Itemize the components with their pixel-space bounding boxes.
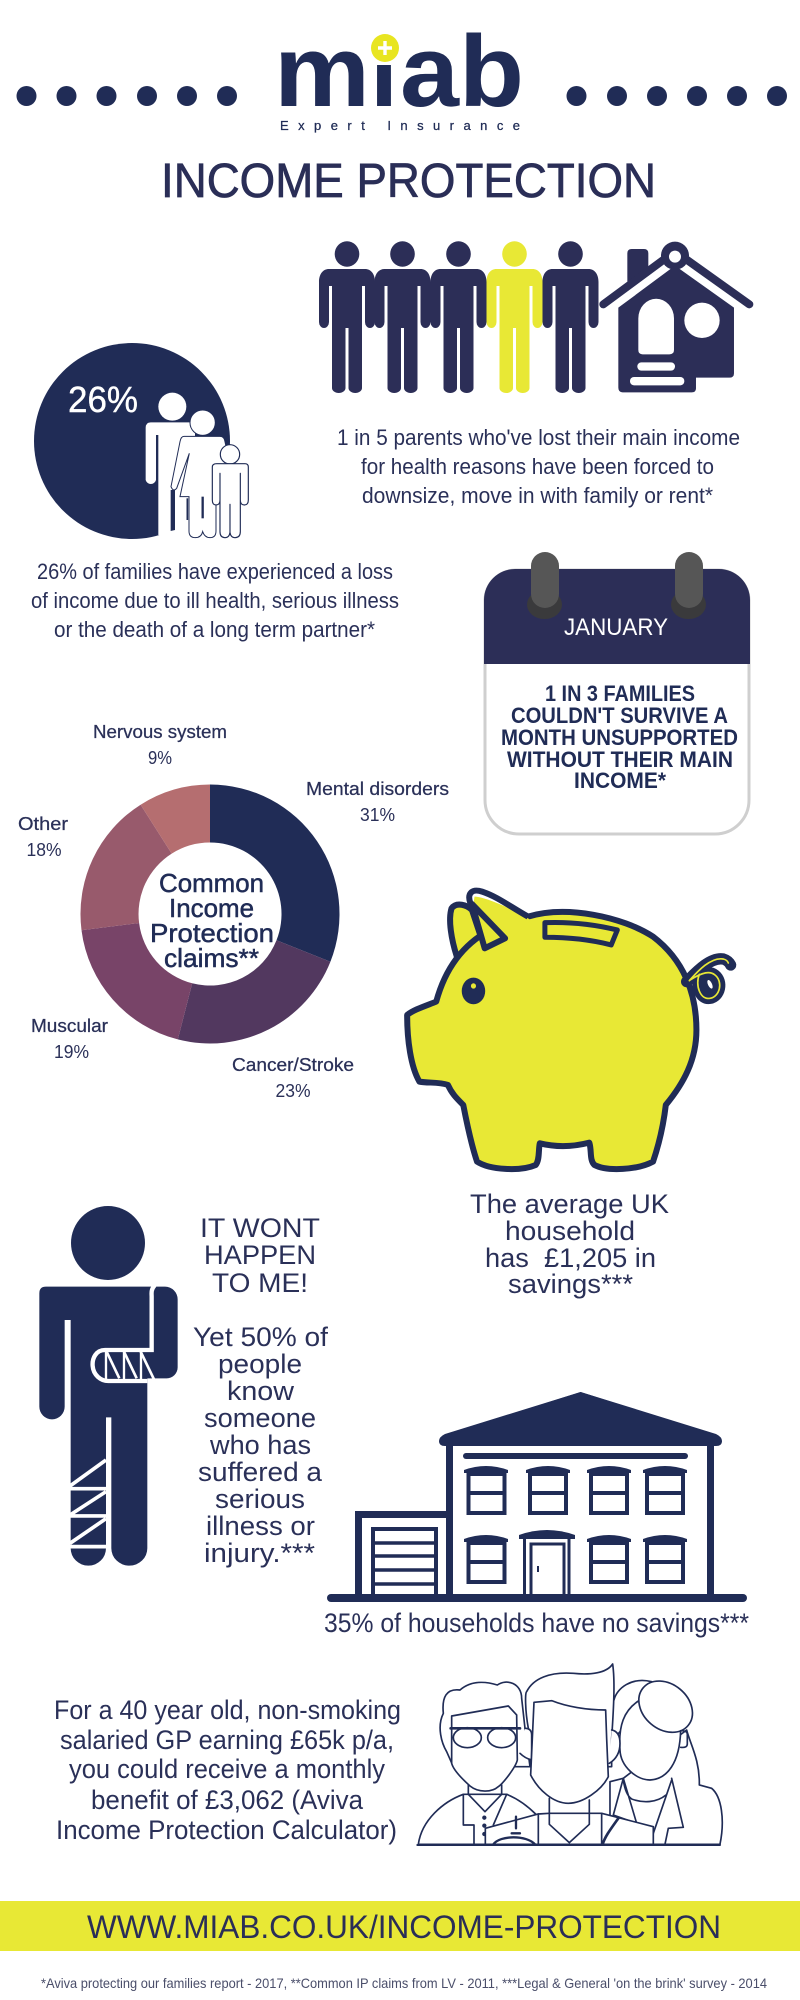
text: yet 50% of people xyxy=(193,1322,329,1568)
icon: injured person with casts xyxy=(39,1206,178,1566)
text: yet 50% of people: serious xyxy=(215,1484,305,1514)
label: cancer/stroke: 23% xyxy=(276,1081,310,1101)
calendar message: WITHOUT THEIR MAIN xyxy=(507,747,733,772)
lower window caps xyxy=(464,1535,687,1542)
label: mental disorders: Mental disorders xyxy=(306,779,449,799)
text: 1 in 5 parents: downsize, move in with family or rent* xyxy=(362,483,713,508)
upper windows xyxy=(468,1474,683,1513)
segment: muscular 19% xyxy=(82,923,192,1039)
text: yet 50% of people: suffered a xyxy=(198,1457,322,1487)
icon: 26% circle with family xyxy=(34,343,248,539)
text: GP benefit example: For a 40 year old, non-smoking xyxy=(54,1695,401,1725)
label: cancer/stroke xyxy=(232,1055,354,1101)
banner: website URL xyxy=(0,1901,800,1951)
text: average UK household savings: household xyxy=(505,1216,635,1246)
donut centre label: Common xyxy=(159,868,264,898)
calendar message: 1 IN 3 FAMILIES xyxy=(545,681,695,706)
segment: mental disorders 31% xyxy=(210,784,340,962)
calendar message: MONTH UNSUPPORTED xyxy=(501,725,738,750)
logo: miab Expert Insurance: Expert Insurance xyxy=(280,118,520,133)
label: muscular: Muscular xyxy=(31,1016,108,1036)
text: yet 50% of people: Yet 50% of xyxy=(193,1322,329,1352)
text: 1 in 5 parents: for health reasons have been forced to xyxy=(361,454,714,479)
logo: miab Expert Insurance xyxy=(274,16,524,133)
text: GP benefit example: salaried GP earning £65k p/a, xyxy=(60,1725,394,1755)
text: GP benefit example: you could receive a monthly xyxy=(69,1754,386,1784)
text: average UK household savings: has £1,205 in xyxy=(485,1243,656,1273)
text: 26% of families xyxy=(31,559,399,642)
decorative dots left xyxy=(16,86,237,106)
text: yet 50% of people: people xyxy=(218,1349,302,1379)
centre man xyxy=(485,1664,653,1844)
text: average UK household savings xyxy=(470,1189,669,1299)
text: yet 50% of people: know xyxy=(227,1376,295,1406)
label: muscular xyxy=(31,1016,108,1062)
icon: piggy bank xyxy=(407,891,731,1169)
logo: miab Expert Insurance: a xyxy=(400,16,460,128)
calendar message xyxy=(501,681,738,793)
segment: other 18% xyxy=(80,805,172,930)
text: yet 50% of people: illness or xyxy=(206,1511,315,1541)
text: 26% of families: 26% of families have experienced a loss xyxy=(37,559,393,584)
label: muscular: 19% xyxy=(54,1042,89,1062)
text: it wont happen to me: HAPPEN xyxy=(204,1240,316,1270)
text: GP benefit example: benefit of £3,062 (Aviva xyxy=(91,1785,363,1815)
label: mental disorders xyxy=(306,779,449,825)
title: INCOME PROTECTION xyxy=(161,155,656,208)
calendar message: COULDN'T SURVIVE A xyxy=(511,703,728,728)
decorative dots right xyxy=(566,86,787,106)
text: 26% of families: of income due to ill health, serious illness xyxy=(31,588,399,613)
front door xyxy=(519,1530,575,1596)
upper window caps xyxy=(464,1466,687,1473)
donut centre label: Income xyxy=(169,893,254,923)
label: mental disorders: 31% xyxy=(360,805,395,825)
text: 1 in 5 parents xyxy=(337,425,740,508)
chart: donut of common income protection claims xyxy=(18,722,449,1101)
man with glasses xyxy=(418,1682,538,1844)
garage xyxy=(355,1511,448,1596)
donut centre label: Protection xyxy=(150,918,274,948)
label: cancer/stroke: Cancer/Stroke xyxy=(232,1055,354,1075)
text: yet 50% of people: injury.*** xyxy=(204,1538,315,1568)
icon: five people and house xyxy=(319,241,749,393)
text: yet 50% of people: who has xyxy=(209,1430,311,1460)
segment: cancer/stroke 23% xyxy=(178,940,330,1043)
panel: calendar xyxy=(484,552,750,834)
text: it wont happen to me: IT WONT xyxy=(200,1213,320,1243)
text: 26% of families: or the death of a long term partner* xyxy=(54,617,375,642)
donut centre label xyxy=(150,868,274,973)
text: yet 50% of people: someone xyxy=(204,1403,316,1433)
lower windows xyxy=(468,1543,683,1582)
icon: family silhouettes xyxy=(146,393,248,538)
icon: house with garage xyxy=(327,1392,747,1602)
label: other: Other xyxy=(18,814,68,834)
icon: house xyxy=(603,242,749,392)
woman xyxy=(608,1670,722,1844)
calendar header xyxy=(484,569,750,664)
text: GP benefit example xyxy=(54,1695,401,1845)
logo: miab Expert Insurance: b xyxy=(459,16,524,128)
icon: pig tail xyxy=(687,959,731,998)
segment: nervous system 9% xyxy=(141,784,210,854)
label: nervous system: Nervous system xyxy=(93,722,227,742)
label: nervous system xyxy=(93,722,227,768)
text: GP benefit example: Income Protection Calculator) xyxy=(56,1815,397,1845)
text: average UK household savings: The average UK xyxy=(470,1189,669,1219)
stat: 26%: 26% xyxy=(68,379,138,420)
banner: website URL: WWW.MIAB.CO.UK/INCOME-PROTECTION xyxy=(87,1909,721,1945)
month label: JANUARY xyxy=(564,614,668,641)
calendar rings xyxy=(527,552,706,619)
text: 1 in 5 parents: 1 in 5 parents who've lost their main income xyxy=(337,425,740,450)
donut centre label: claims** xyxy=(164,943,259,973)
text: average UK household savings: savings*** xyxy=(508,1269,633,1299)
text: 35% of households: 35% of households have no savings*** xyxy=(324,1608,749,1638)
label: other xyxy=(18,814,68,860)
icon: three professionals line art xyxy=(417,1664,722,1845)
label: other: 18% xyxy=(26,840,62,860)
text: it wont happen to me: TO ME! xyxy=(212,1268,308,1298)
calendar message: INCOME* xyxy=(574,768,666,793)
icon: row of people, one highlighted xyxy=(319,241,598,393)
label: nervous system: 9% xyxy=(148,748,172,768)
logo: miab Expert Insurance: i xyxy=(370,16,398,128)
logo: miab Expert Insurance: m xyxy=(274,16,370,128)
text: it wont happen to me xyxy=(200,1213,320,1298)
